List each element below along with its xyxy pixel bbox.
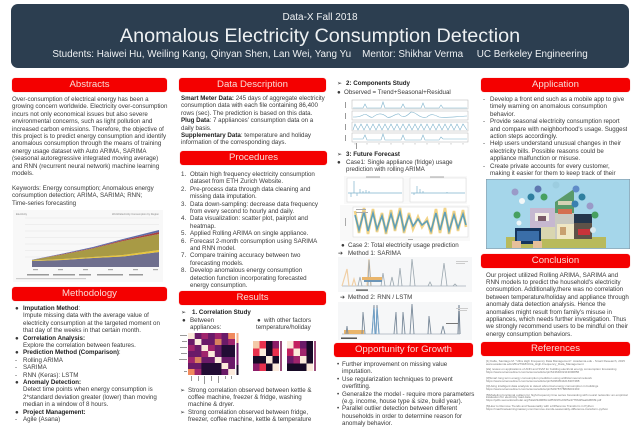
panel: conclusion bbox=[480, 254, 630, 338]
method 2 label: ➔ bbox=[340, 294, 345, 300]
reference list: https://pdfs.semanticscholar.org/52a0/3d96f8c1c85f19f7e9f1f5e37f78d25aa6d6f6f9.pdf bbox=[486, 398, 601, 402]
title: Anomalous Electricity Consumption Detection bbox=[120, 25, 520, 47]
reference list: [6]How to Remove Trends and Seasonality with a Difference Transform in Python bbox=[486, 404, 594, 408]
panel: components study and forecasts bbox=[337, 80, 472, 340]
procedures list: Data visualization: scatter plot, pairplot and bbox=[190, 215, 308, 222]
methodology list: Anomaly Detection: bbox=[23, 379, 81, 386]
method 1 label: Method 1: SARIMA bbox=[348, 250, 401, 256]
methodology list: ● bbox=[15, 305, 19, 312]
conclusion text: energy consumption behaviors. bbox=[486, 331, 572, 338]
procedures list: heatmap. bbox=[190, 223, 216, 230]
conclusion text: between temperature/holiday and appliance through bbox=[486, 294, 629, 301]
heatmap: holiday correlation bbox=[287, 341, 316, 371]
methodology list: RNN (Keras): LSTM bbox=[23, 372, 78, 379]
conclusion text: consumption. Additionally,there was no correlation bbox=[486, 286, 623, 293]
chart: LSTM prediction bbox=[338, 302, 472, 340]
procedures list: 1. bbox=[181, 171, 186, 178]
correlation findings text: machine & dryer. bbox=[188, 401, 234, 408]
application list: and compare with neighborhood's usage. Suggest bbox=[490, 126, 627, 133]
heading: abstracts bbox=[12, 78, 167, 92]
future forecast subheading: 3: Future Forecast bbox=[346, 151, 400, 158]
application list: - bbox=[483, 163, 485, 170]
other factors label bbox=[256, 316, 311, 331]
methodology list: ● bbox=[15, 335, 19, 342]
other factors label: temperature/holiday bbox=[256, 324, 311, 331]
opportunity list: Use regularization techniques to prevent bbox=[342, 376, 453, 383]
reference list: https://www.sciencedirect.com/science/article/pii/S0360544216307488 bbox=[486, 379, 579, 383]
heading: procedures: Procedures bbox=[229, 152, 278, 163]
opportunity list: Further improvement on missing value bbox=[342, 361, 447, 368]
heading: opportunity for growth: Opportunity for Growth bbox=[355, 344, 452, 355]
reference list: [2a] review on applications of ANN and SVM for building electrical energy consumption forecasting bbox=[486, 367, 616, 371]
correlation findings text: freezer, coffee machine, kettle & temperature bbox=[188, 416, 311, 423]
procedures list: Obtain high frequency electricity consumption bbox=[190, 171, 315, 178]
correlation findings text: ➢ bbox=[180, 386, 185, 394]
method 1 label: ➔ bbox=[338, 250, 343, 256]
abstract text: consumption detection; ARIMA, SARIMA; RNN; bbox=[12, 192, 142, 199]
methodology list: Explore the correlation between features. bbox=[23, 342, 136, 349]
reference list: www.academia.edu/25127918/Ultra_High-Frequency_Data_Management bbox=[486, 362, 584, 366]
panel: application bbox=[480, 78, 630, 249]
case 1 text: Case1: Single appliance (fridge) usage bbox=[346, 159, 453, 166]
data description text bbox=[181, 95, 325, 146]
procedures list: energy consumption. bbox=[190, 282, 247, 289]
abstract text bbox=[12, 96, 168, 207]
abstract text: environmental concerns, such as light pollution and bbox=[12, 118, 152, 125]
panel: abstracts bbox=[12, 78, 168, 280]
application list: Provide seasonal electricity consumption report bbox=[490, 118, 620, 125]
application list: making it easier for them to keep track of their bbox=[490, 170, 616, 177]
methodology list: Agile (Asana) bbox=[23, 416, 60, 423]
heading: methodology: Methodology bbox=[62, 288, 117, 299]
methodology list: - bbox=[15, 364, 17, 371]
heading: application bbox=[481, 78, 630, 92]
heading: references: References bbox=[531, 343, 580, 354]
abstract text: growing concern worldwide. Electricity over-consumption bbox=[12, 103, 167, 110]
methodology list: Prediction Method (Comparison): bbox=[23, 349, 121, 356]
methodology list: Impute missing data with the average value of bbox=[23, 312, 149, 319]
panel: opportunity for growth bbox=[334, 342, 474, 427]
panel: methodology bbox=[12, 286, 168, 423]
methodology list: that day of the weeks in that certain month. bbox=[23, 327, 141, 334]
method 2 label: Method 2: RNN / LSTM bbox=[348, 294, 412, 300]
students and mentor line: Students: Haiwei Hu, Weiling Kang, Qinyan Shen, Lan Wei, Yang Yu Mentor: Shikhar Verma UC Berkeley Engineering bbox=[52, 48, 588, 60]
abstract text: this project is to predict energy consumption and identify bbox=[12, 133, 166, 140]
correlation findings text: coffee machine, freezer & fridge, washing bbox=[188, 394, 302, 401]
abstract text: increased carbon emissions. Therefore, the objective of bbox=[12, 126, 164, 133]
methodology list: Rolling ARIMA bbox=[23, 357, 63, 364]
heading: results: Results bbox=[236, 292, 268, 303]
abstract text: incurs not only economical issues but also severe bbox=[12, 111, 148, 118]
abstract text: and RNN (recurrent neural network) machine learning bbox=[12, 163, 159, 170]
heading: data description bbox=[179, 78, 326, 92]
conclusion text bbox=[486, 272, 629, 338]
methodology list: electricity consumption at the targeted moment on bbox=[23, 320, 160, 327]
application list: - bbox=[483, 118, 485, 125]
opportunity list bbox=[337, 361, 474, 427]
heading: conclusion: Conclusion bbox=[532, 255, 579, 266]
between appliances label: appliances: bbox=[190, 324, 221, 331]
course label: Data-X Fall 2018 bbox=[282, 12, 358, 23]
methodology list: Detect time points when energy consumption is bbox=[23, 386, 153, 393]
between appliances label: ● bbox=[182, 316, 186, 324]
heading: references bbox=[481, 342, 630, 356]
application list: - bbox=[483, 140, 485, 147]
procedures list: forecasting models. bbox=[190, 260, 244, 267]
procedures list: from every second to hourly and daily. bbox=[190, 208, 294, 215]
application list: action steps accordingly. bbox=[490, 133, 557, 140]
reference list: https://machinelearningmastery.com/remove-trends-seasonality-difference-transform-python bbox=[486, 407, 608, 411]
correlation study subheading: ➢ bbox=[181, 308, 186, 316]
methodology list: median in a window of 8 hours. bbox=[23, 401, 108, 408]
heatmap: appliances correlation bbox=[179, 333, 238, 384]
panel: references bbox=[480, 342, 630, 411]
heading: data description: Data Description bbox=[217, 79, 288, 90]
application list: - bbox=[483, 96, 485, 103]
methodology list: - bbox=[15, 416, 17, 423]
future forecast subheading: ➢ bbox=[337, 151, 342, 158]
procedures list bbox=[181, 171, 318, 289]
methodology list: - bbox=[15, 372, 17, 379]
opportunity list: • bbox=[337, 405, 339, 412]
application list: Create private accounts for every customer, bbox=[490, 163, 610, 170]
case 2 text: Case 2: Total electricity usage prediction bbox=[348, 242, 459, 249]
opportunity list: Parallel outlier detection between different bbox=[342, 405, 457, 412]
procedures list: Forecast 2-month consumption using SARIMA bbox=[190, 238, 317, 245]
methodology list bbox=[15, 305, 160, 423]
header banner bbox=[11, 4, 629, 68]
application list: Help users understand unusual changes in their bbox=[490, 140, 621, 147]
opportunity list: imputation. bbox=[342, 368, 372, 375]
other factors label: ● bbox=[257, 316, 261, 324]
methodology list: Imputation Method: bbox=[23, 305, 80, 312]
procedures list: detection function incorporating forecasted bbox=[190, 275, 307, 282]
procedures list: Compare training accuracy between two bbox=[190, 252, 300, 259]
correlation study subheading: 1. Correlation Study bbox=[192, 308, 251, 316]
abstract text: anomalous consumption through the means of training bbox=[12, 140, 161, 147]
observed equation: Observed = Trend+Seasonal+Residual bbox=[344, 89, 451, 96]
chart: world electricity consumption by region bbox=[16, 212, 160, 280]
methodology list: Correlation Analysis: bbox=[23, 335, 85, 342]
methodology list: ● bbox=[15, 349, 19, 356]
panel: procedures bbox=[180, 150, 328, 289]
methodology list: - bbox=[15, 357, 17, 364]
heatmap: temperature correlation bbox=[253, 341, 282, 371]
case 1 text: prediction with rolling ARIMA bbox=[346, 166, 425, 173]
application list: behavior. bbox=[490, 111, 515, 118]
conclusion text: appliances, which needs further investigation. Thus bbox=[486, 316, 626, 323]
procedures list: Develop anomalous energy consumption bbox=[190, 267, 302, 274]
methodology list: SARIMA bbox=[23, 364, 47, 371]
procedures list: 3. bbox=[181, 201, 186, 208]
opportunity list: • bbox=[337, 391, 339, 398]
conclusion text: we strongly recommend users to be mindful on their bbox=[486, 323, 628, 330]
opportunity list: overfitting. bbox=[342, 383, 371, 390]
reference list: https://www.sciencedirect.com/science/article/pii/S0378778806001393 bbox=[486, 387, 579, 391]
methodology list: 2*standard deviation greater (lower) than moving bbox=[23, 394, 157, 401]
case 2 text: ● bbox=[341, 242, 345, 249]
chart: world electricity consumption by region: Electricity bbox=[16, 212, 28, 216]
panel: data description bbox=[178, 78, 326, 146]
conclusion text: anomaly data detection analysis. Hence the bbox=[486, 301, 606, 308]
procedures list: Pre-process data through data cleaning and bbox=[190, 186, 310, 193]
application list: appliance malfunction or misuse. bbox=[490, 155, 580, 162]
opportunity list: • bbox=[337, 361, 339, 368]
case 1 text: ● bbox=[337, 159, 341, 166]
abstract text: energy usage dataset with Auto ARIMA, SARIMA bbox=[12, 148, 146, 155]
illustration: smart home bbox=[486, 179, 630, 249]
opportunity list: Generalize the model - require more parameters bbox=[342, 391, 474, 398]
panel: results bbox=[178, 290, 326, 423]
opportunity list: (e.g. income, house type & size, build year). bbox=[342, 398, 462, 405]
heading: results bbox=[179, 291, 326, 305]
reference list: https://www.sciencedirect.com/science/article/pii/S1364032113000856 bbox=[486, 370, 579, 374]
heading: methodology bbox=[12, 287, 167, 301]
other factors label: with other factors bbox=[264, 316, 311, 324]
application list: electricity bills. Possible reasons could be bbox=[490, 148, 604, 155]
heading: conclusion bbox=[481, 254, 630, 268]
abstract text: (seasonal autoregressive integrated moving average) bbox=[12, 155, 158, 162]
chart: decomposition panels bbox=[345, 100, 468, 149]
components study subheading: 2: Components Study bbox=[346, 80, 410, 87]
application list: timely warning on anomalous consumption bbox=[490, 103, 607, 110]
data description text: consumption data with each file containing 86,400 bbox=[181, 102, 318, 109]
chart: world electricity consumption by region: World Electricity Consumption by Region bbox=[112, 212, 160, 216]
heading: opportunity for growth bbox=[334, 343, 473, 357]
procedures list: Data down-sampling: decrease data frequency bbox=[190, 201, 318, 208]
reference list: [3]Smart long term energy consumption prediction using artificial neural network bbox=[486, 376, 592, 380]
methodology list: ● bbox=[15, 409, 19, 416]
conclusion text: RNN models to predict the household's electricity bbox=[486, 279, 621, 286]
methodology list: ● bbox=[15, 379, 19, 386]
data description text: Plug Data: 7 appliances' consumption data on a bbox=[181, 117, 313, 124]
procedures list: 8. bbox=[181, 267, 186, 274]
reference list: evaluation for electricity load data bbox=[486, 395, 531, 399]
methodology list: Project Management: bbox=[23, 409, 86, 416]
between appliances label: Between bbox=[190, 316, 214, 324]
abstract text: Keywords: Energy consumption; Anomalous energy bbox=[12, 185, 154, 192]
reference list: [5]Modeling functional outliers for high-frequency time series forecasting with neural networks: an empirical bbox=[486, 393, 628, 397]
procedures list: missing data imputation. bbox=[190, 193, 257, 200]
opportunity list: • bbox=[337, 376, 339, 383]
chart: SARIMA prediction bbox=[338, 257, 472, 292]
abstract text: models. bbox=[12, 170, 34, 177]
observed equation: ● bbox=[337, 89, 341, 96]
opportunity list: households in order to determine reason for bbox=[342, 413, 462, 420]
procedures list: dataset from ETH Zurich Website. bbox=[190, 178, 283, 185]
conclusion text: Our project utilized Rolling ARIMA, SARIMA and bbox=[486, 272, 618, 278]
opportunity list: anomaly behavior. bbox=[342, 420, 392, 427]
case 1 text bbox=[337, 159, 453, 173]
correlation findings text: Strong correlation observed between kettle & bbox=[188, 386, 311, 394]
chart: rolling ARIMA forecast bbox=[345, 206, 468, 240]
procedures list: and RNN model. bbox=[190, 245, 236, 252]
data description text: rows (sec). The prediction is based on this data. bbox=[181, 110, 312, 117]
components study subheading: ➢ bbox=[337, 80, 342, 87]
abstract text: Time-series forecasting bbox=[12, 200, 76, 207]
reference list: [1] Kafle, Santiago M. "Ultra High Frequency Data Management". Academia.edu - Smart Research, 2015 bbox=[486, 359, 625, 363]
heading: application: Application bbox=[532, 79, 579, 90]
between appliances label bbox=[182, 316, 221, 331]
correlation findings text: ➢ bbox=[180, 409, 185, 416]
conclusion text: anomalies might result from family's misuse in bbox=[486, 309, 612, 316]
reference list bbox=[486, 359, 628, 411]
procedures list: 2. bbox=[181, 186, 186, 193]
application list bbox=[483, 96, 627, 177]
data description text: daily basis. bbox=[181, 125, 212, 132]
procedures list: 6. bbox=[181, 238, 186, 245]
procedures list: 4. bbox=[181, 215, 186, 222]
heading: procedures bbox=[180, 151, 327, 165]
chart: autocorrelation plots bbox=[346, 176, 466, 202]
procedures list: Applied Rolling ARIMA on single appliance. bbox=[190, 230, 308, 237]
reference list: [4]Using intelligent data analysis to detect abnormal energy consumption in buildings bbox=[486, 384, 598, 388]
data description text: Supplementary Data: temperature and holiday bbox=[181, 132, 311, 139]
application list: Develop a front end such as a mobile app to give bbox=[490, 96, 624, 103]
correlation findings text: Strong correlation observed between fridge, bbox=[188, 409, 308, 416]
heading: abstracts: Abstracts bbox=[70, 79, 110, 90]
data description text: information of the corresponding days. bbox=[181, 139, 286, 146]
procedures list: 7. bbox=[181, 252, 186, 259]
abstract text: Over-consumption of electrical energy has been a bbox=[12, 96, 149, 103]
data description text: Smart Meter Data: 245 days of aggregate electricity bbox=[181, 95, 325, 102]
procedures list: 5. bbox=[181, 230, 186, 237]
correlation findings text bbox=[180, 386, 312, 423]
